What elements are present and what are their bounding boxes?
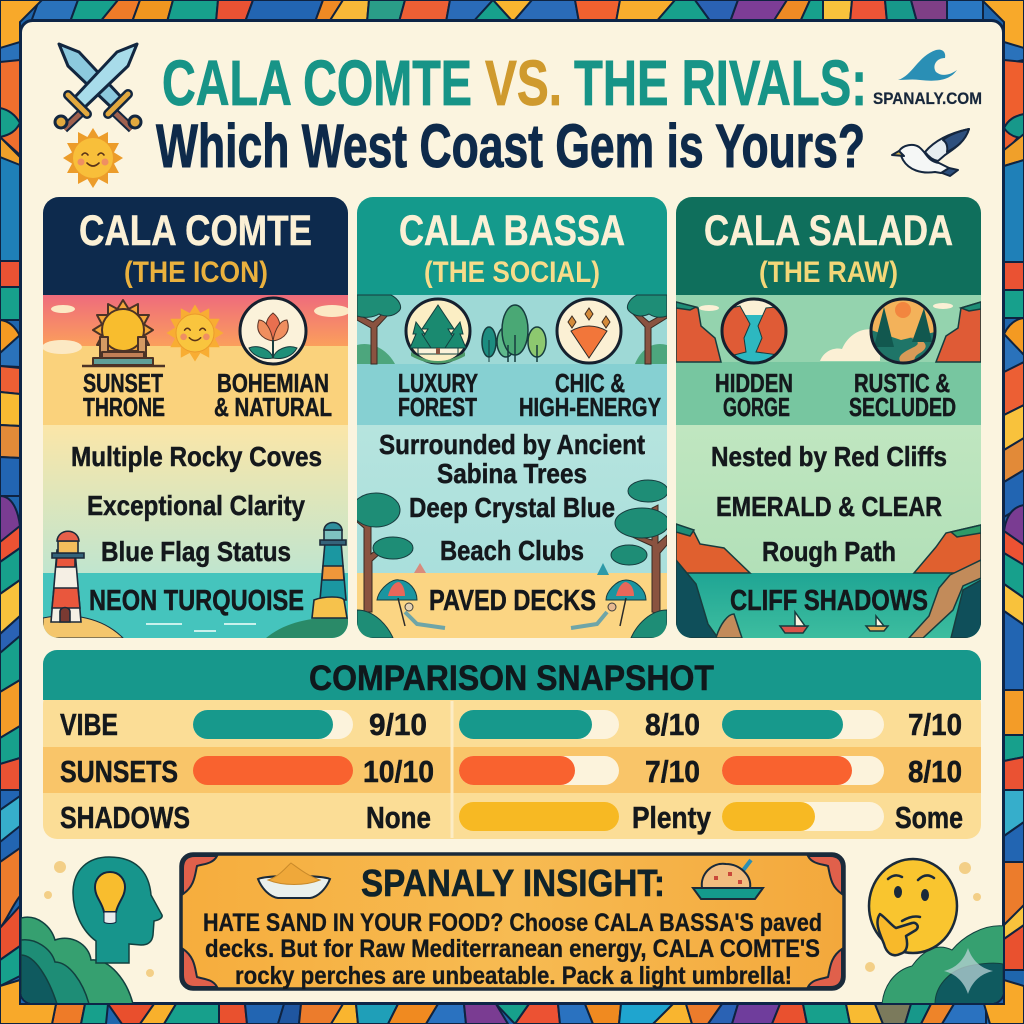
header: Cala Bassa: (THE SOCIAL): [424, 256, 600, 289]
illustration: top trees: [357, 295, 667, 364]
icon: left lighthouse: [51, 531, 84, 622]
label: sunset throne: THRONE: [83, 392, 165, 422]
label: rustic and secluded: RUSTIC &: [854, 368, 950, 398]
panel: comparison snapshot: [43, 650, 981, 839]
label: bohemian and natural: BOHEMIAN: [217, 368, 329, 398]
row labels: [60, 707, 190, 835]
icon: smiling sun: [63, 128, 123, 188]
label: chic and high-energy: CHIC &: [555, 368, 625, 398]
icon: crossed swords: [55, 44, 141, 129]
header: Cala Comte: [43, 197, 348, 295]
icon: right lighthouse: [312, 522, 347, 618]
text: list: Sabina Trees: [437, 458, 587, 489]
title: VS.: [485, 47, 562, 119]
icon: rustic path: [871, 299, 935, 366]
text: list: Deep Crystal Blue: [409, 492, 615, 523]
label: chic and high-energy: [520, 374, 661, 416]
label: sunset throne: SUNSET: [83, 368, 163, 398]
label: hidden gorge: [716, 374, 792, 416]
header: Cala Comte: CALA COMTE: [79, 207, 312, 255]
values: Cala Salada: 8/10: [908, 754, 962, 789]
text: list: Surrounded by Ancient: [379, 429, 645, 460]
text: list: PAVED DECKS: [429, 585, 596, 617]
text: list: [711, 441, 947, 617]
header: Cala Salada: [676, 197, 981, 295]
label: chic and high-energy: HIGH-ENERGY: [519, 392, 661, 422]
header: comparison snapshot: COMPARISON SNAPSHOT: [309, 659, 714, 698]
title: [156, 47, 867, 180]
callout: spanaly insight: SPANALY INSIGHT:: [361, 863, 665, 905]
row labels: VIBE: [60, 707, 118, 742]
header: comparison snapshot: [43, 650, 981, 700]
insight text: rocky perches are unbeatable. Pack a light umbrella!: [235, 962, 792, 990]
values: Cala Comte: 9/10: [369, 707, 427, 742]
clouds: [42, 305, 350, 354]
icon: smiling sun: [166, 304, 224, 362]
text: list: Multiple Rocky Coves: [71, 441, 322, 472]
label: rustic and secluded: SECLUDED: [849, 392, 956, 422]
illustration: lower cliffs, water and boats: [676, 524, 981, 638]
icon: bowl of sand: [258, 863, 330, 898]
label: bohemian and natural: [214, 374, 332, 416]
row labels: SUNSETS: [60, 754, 178, 789]
icon: thinking face: [869, 859, 957, 955]
label: luxury forest: LUXURY: [398, 368, 478, 398]
text: list: [71, 441, 322, 617]
label: hidden gorge: HIDDEN: [715, 368, 793, 398]
panel: Cala Salada: [676, 197, 981, 638]
illustration: left hills: [21, 917, 133, 1004]
text: list: NEON TURQUOISE: [89, 585, 304, 617]
text: list: Nested by Red Cliffs: [711, 441, 947, 472]
icon: chic high-energy: [557, 299, 621, 363]
label: hidden gorge: GORGE: [723, 392, 790, 422]
text: list: [379, 429, 645, 617]
illustration: lower trees, umbrellas and loungers: [352, 480, 669, 638]
values: Cala Comte: 10/10: [363, 754, 434, 789]
callout: spanaly insight: [181, 854, 844, 990]
header: Cala Salada: CALA SALADA: [704, 207, 953, 255]
header: Cala Comte: (THE ICON): [124, 256, 268, 289]
insight text: [203, 909, 822, 990]
label: luxury forest: FOREST: [398, 392, 477, 422]
values: Cala Bassa: [632, 707, 712, 835]
header: Cala Salada: (THE RAW): [759, 256, 898, 289]
header: Cala Bassa: CALA BASSA: [399, 207, 625, 255]
text: list: CLIFF SHADOWS: [730, 585, 928, 617]
decorative dots: [44, 861, 981, 977]
row labels: SHADOWS: [60, 800, 190, 835]
label: luxury forest: [399, 374, 478, 416]
header: Cala Bassa: [357, 197, 667, 295]
values: Cala Bassa: 8/10: [645, 707, 700, 742]
logo: wave and spanaly.com: [873, 50, 982, 108]
watermark sparkle: [944, 948, 993, 994]
panel: Cala Bassa: [352, 197, 669, 638]
text: list: Beach Clubs: [440, 535, 584, 566]
panel: Cala Comte: [42, 197, 350, 638]
label: rustic and secluded: [849, 374, 956, 416]
values: Cala Comte: [363, 707, 434, 835]
text: list: EMERALD & CLEAR: [716, 491, 942, 522]
text: list: Exceptional Clarity: [87, 490, 305, 521]
logo: wave and spanaly.com: SPANALY.COM: [873, 90, 982, 108]
text: list: Rough Path: [762, 536, 896, 567]
icon: luxury forest: [406, 299, 470, 364]
values: Cala Salada: [895, 707, 963, 835]
title: CALA COMTE: [162, 47, 472, 119]
illustration: beach and sea: [43, 616, 348, 638]
icon: sunset throne: [82, 300, 165, 366]
bars: Cala Bassa: [459, 710, 619, 831]
icon: flower: [240, 298, 306, 364]
illustration: right hills: [882, 926, 1004, 1004]
corner ornaments: [183, 856, 842, 987]
bars: Cala Comte: [193, 710, 353, 785]
icon: head with lightbulb: [73, 857, 162, 963]
icon: hidden gorge: [722, 299, 786, 365]
values: Cala Salada: 7/10: [908, 707, 962, 742]
illustration: upper cliffs: [676, 302, 981, 362]
values: Cala Bassa: 7/10: [645, 754, 700, 789]
insight text: decks. But for Raw Mediterranean energy, CALA COMTE'S: [205, 935, 820, 963]
label: bohemian and natural: & NATURAL: [214, 392, 332, 422]
icon: seagull: [892, 129, 969, 176]
insight text: HATE SAND IN YOUR FOOD? Choose CALA BASSA'S paved: [203, 909, 822, 937]
bars: Cala Salada: [722, 710, 884, 831]
illustration: clouds: [699, 303, 953, 361]
values: Cala Comte: None: [366, 800, 431, 835]
title: THE RIVALS:: [574, 47, 867, 119]
values: Cala Salada: Some: [895, 800, 963, 835]
icon: dish of food: [693, 860, 763, 899]
label: sunset throne: [83, 374, 164, 416]
text: list: Blue Flag Status: [101, 536, 291, 567]
values: Cala Bassa: Plenty: [632, 800, 712, 835]
